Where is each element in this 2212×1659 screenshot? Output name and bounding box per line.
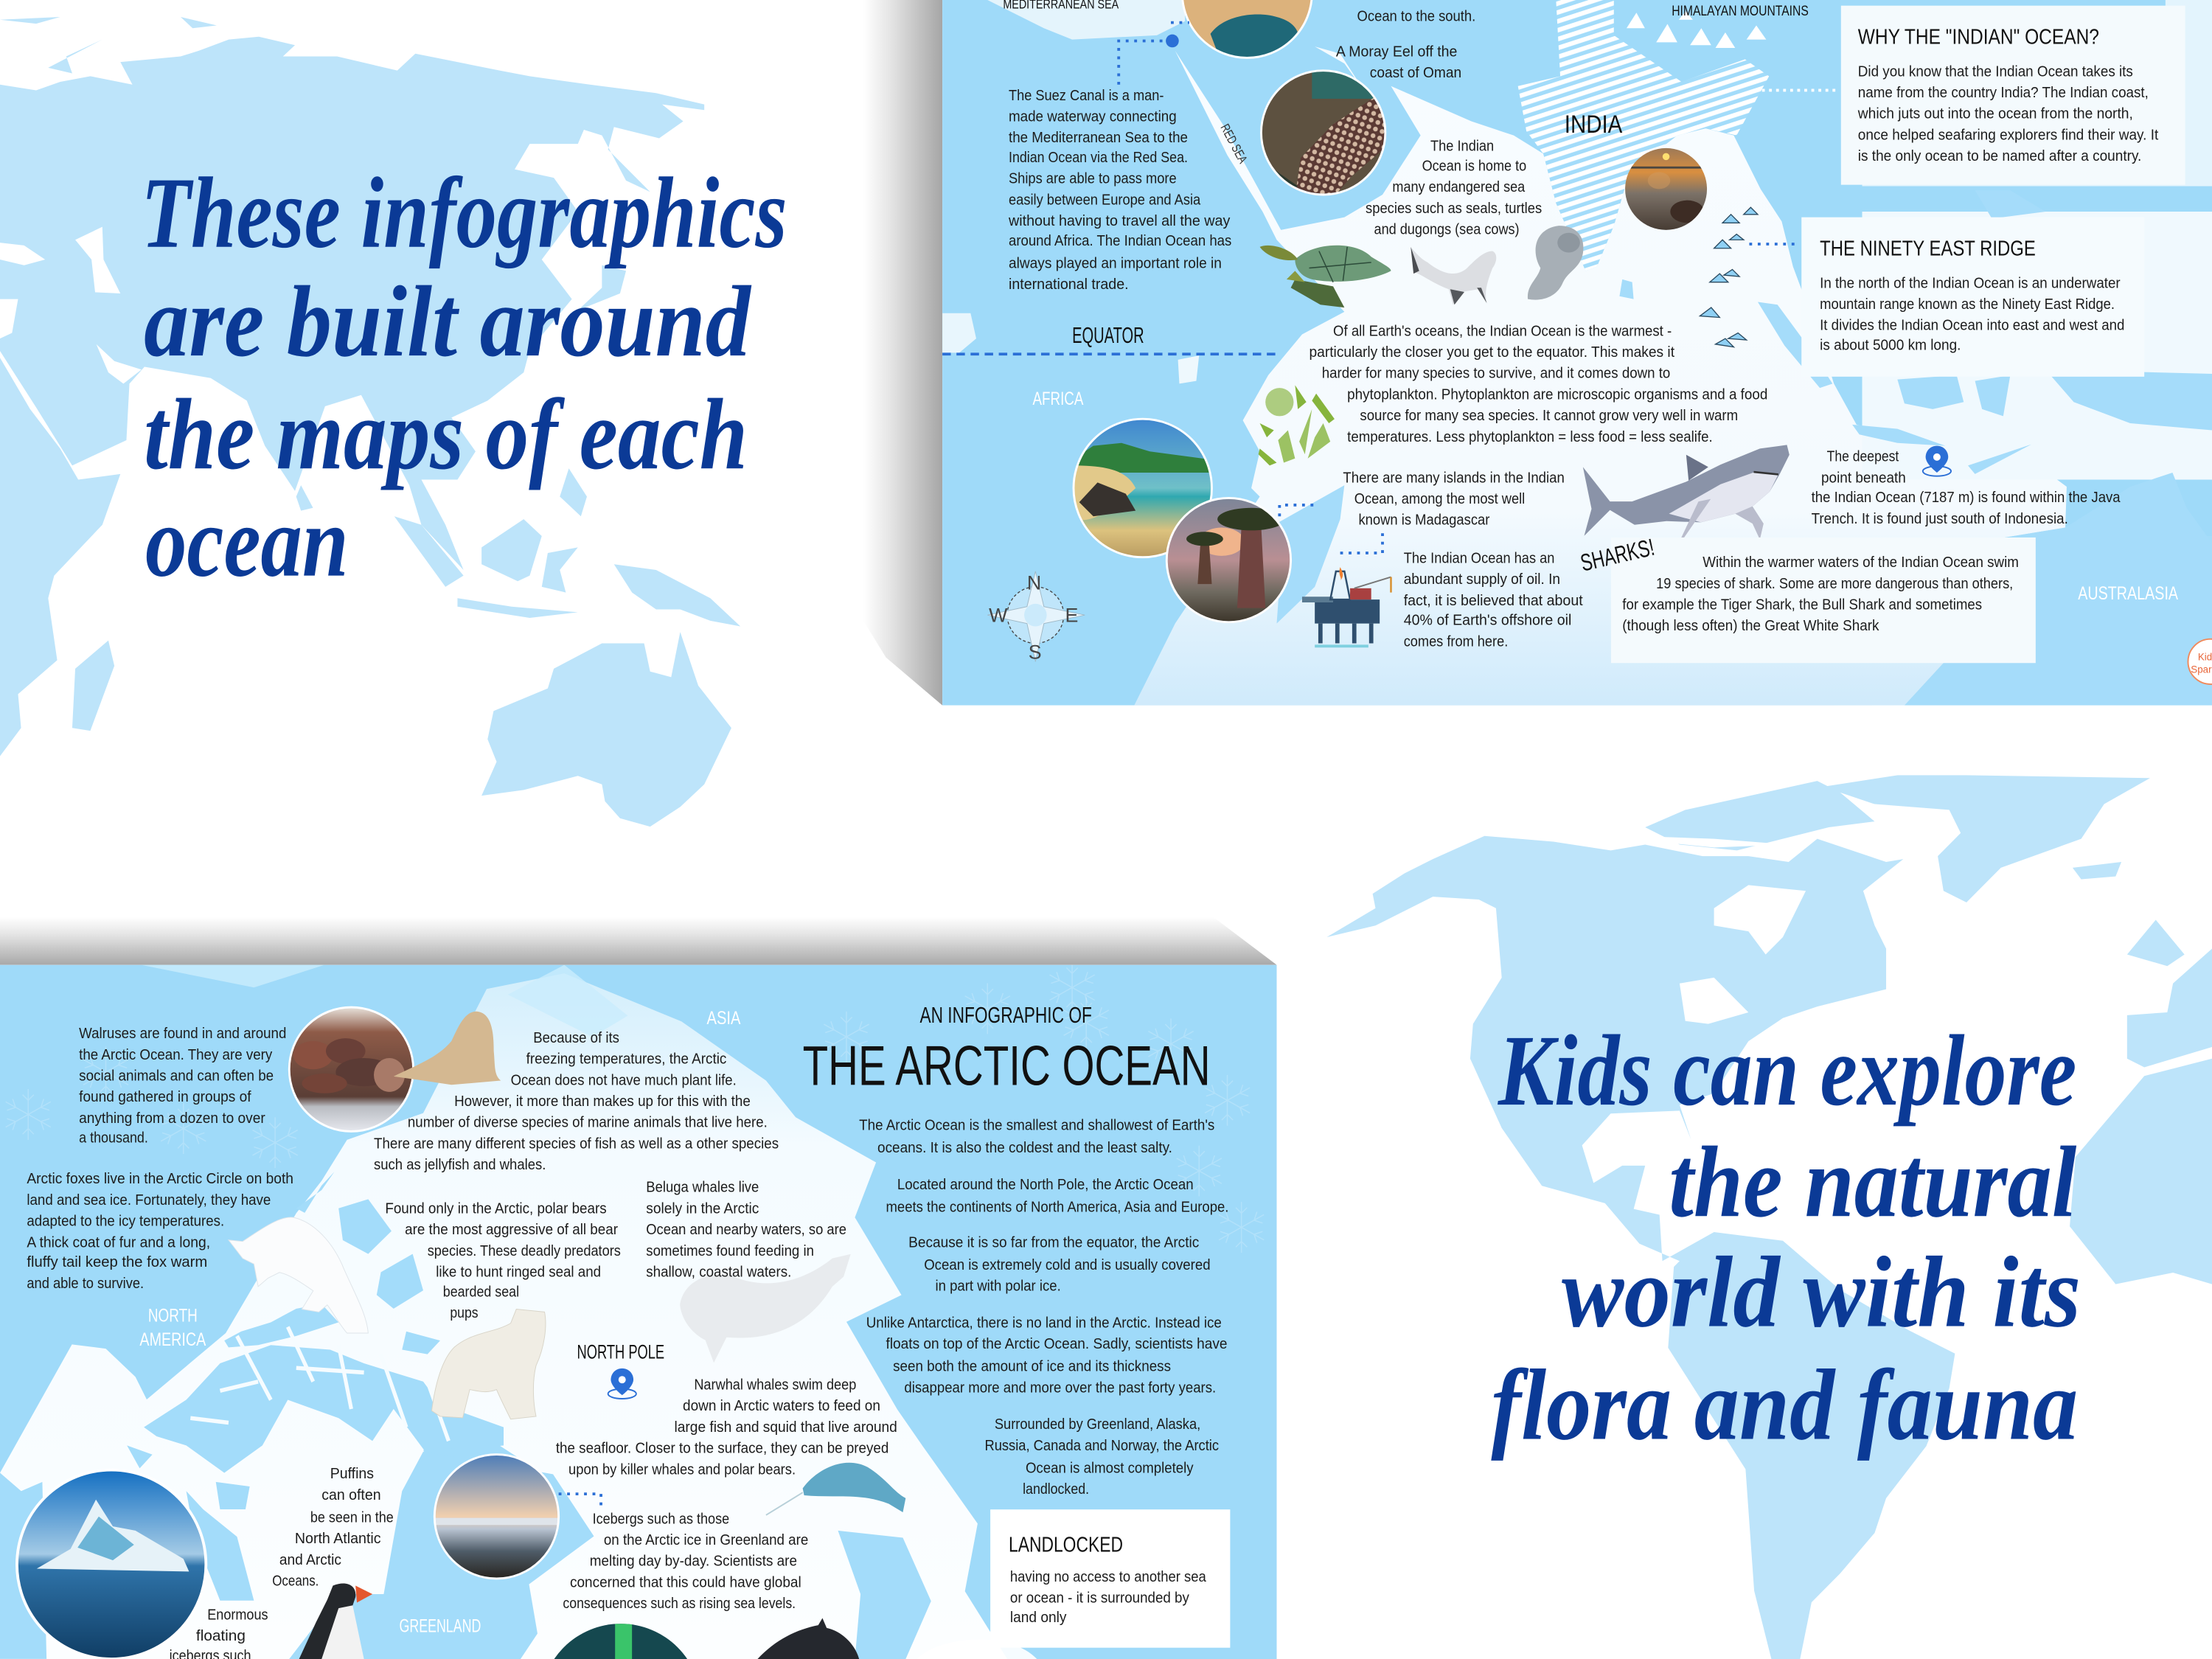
photo: walrus colony [289,1007,414,1131]
text: deepest point: point beneath [1821,470,1906,486]
text: oil: comes from here. [1404,633,1508,650]
pale top land [141,965,627,1037]
info box: why the Indian Ocean: which juts out into the ocean from the north, [1857,106,2133,122]
text: warmest ocean and phytoplankton: harder for many species to survive, and it comes down to [1322,366,1670,382]
text: beluga whales [646,1180,846,1281]
text: islands: known is Madagascar [1358,512,1490,529]
info box: sharks: Within the warmer waters of the Indian Ocean swim [1703,554,2019,571]
text: narwhal whales: down in Arctic waters to feed on [683,1398,880,1414]
text: Arctic Ocean facts: Russia, Canada and Norway, the Arctic [984,1438,1219,1454]
label: Greenland: GREENLAND [399,1616,481,1637]
text: arctic foxes: adapted to the icy temperatures. [27,1214,224,1230]
headline: explore the natural world: flora and fauna [1491,1349,2078,1461]
text: floating icebergs [170,1607,268,1659]
info box: why the Indian Ocean [1841,6,2185,185]
ocean area [1133,51,2067,708]
text: polar bears [385,1200,621,1321]
info box: landlocked: land only [1010,1610,1067,1626]
label: North Pole: NORTH POLE [577,1340,664,1363]
map pin: Java Trench [1923,446,1951,476]
text: puffins: be seen in the [310,1509,394,1526]
illustration: seamounts [1700,207,1758,347]
text: walruses [79,1026,286,1147]
map pin: North Pole [608,1368,636,1399]
subtitle: AN INFOGRAPHIC OF [919,1003,1092,1028]
headline: explore the natural world: Kids can explore [1497,1014,2076,1127]
text: Arctic Ocean facts: Surrounded by Greenland, Alaska, [995,1416,1200,1433]
headline: maps of each ocean: These infographics [141,156,787,269]
text: Arctic Ocean facts: meets the continents of North America, Asia and Europe. [886,1199,1228,1215]
label: India: INDIA [1565,111,1622,139]
photo: tropical beach [1072,417,1213,559]
photo: Greenland fjord [434,1455,559,1579]
Suez Canal marker [1166,35,1179,47]
text: endangered species [1366,139,1542,238]
text: marine life: number of diverse species of marine animals that live here. [408,1115,768,1131]
text: warmest ocean and phytoplankton: particularly the closer you get to the equator. This makes it [1310,344,1674,361]
text: marine life: However, it more than makes up for this with the [454,1093,751,1110]
info box: Ninety East Ridge: It divides the Indian Ocean into east and west and [1820,318,2124,334]
illustration: walrus [394,1012,501,1085]
text: icebergs melting [563,1511,808,1612]
text: beluga whales: sometimes found feeding in [646,1243,814,1259]
text: polar bears: are the most aggressive of all bear [405,1222,618,1238]
info box: Ninety East Ridge: In the north of the Indian Ocean is an underwater [1820,275,2121,291]
illustration: sea turtle [1260,246,1391,307]
text: Suez Canal: Indian Ocean via the Red Sea. [1009,150,1188,166]
logo: Kids Spark [2188,639,2212,684]
text: Suez Canal: The Suez Canal is a man- [1009,88,1164,104]
text: Arctic Ocean facts: Ocean is extremely cold and is usually covered [924,1257,1211,1273]
text: warmest ocean and phytoplankton: Of all Earth's oceans, the Indian Ocean is the warmest - [1333,323,1672,339]
text: oil: The Indian Ocean has an [1404,550,1554,566]
text: Suez Canal: the Mediterranean Sea to the [1009,130,1188,146]
text: marine life: Ocean does not have much plant life. [511,1072,737,1088]
label: North America: NORTH [148,1306,198,1326]
text: puffins: can often [321,1487,381,1503]
text: puffins: North Atlantic [295,1531,381,1547]
text: Arctic Ocean facts: seen both the amount of ice and its thickness [893,1359,1171,1375]
equator dashed line [942,353,1276,355]
text: deepest point [1812,449,2121,527]
text: islands [1343,470,1565,529]
text: icebergs melting: on the Arctic ice in Greenland are [604,1532,808,1548]
text: deepest point: the Indian Ocean (7187 m) is found within the Java [1812,490,2121,506]
Canadian Arctic islands [0,1172,521,1659]
text: marine life: Because of its [533,1030,619,1046]
headline: maps of each ocean: are built around [144,265,752,378]
illustration: compass rose [987,571,1085,663]
text: polar bears: pups [450,1305,479,1321]
text: polar bears: Found only in the Arctic, polar bears [385,1200,607,1217]
headline: explore the natural world [1491,1014,2081,1461]
heading: sharks: SHARKS! [1578,534,1657,577]
islands and neighbouring land [1277,190,2212,706]
caption: moray eel: coast of Oman [1370,65,1461,81]
text: Arctic Ocean facts: Unlike Antarctica, there is no land in the Arctic. Instead ice [866,1315,1222,1331]
info box: sharks: 19 species of shark. Some are more dangerous than others, [1656,576,2013,592]
text: Arctic Ocean facts: disappear more and more over the past forty years. [904,1380,1216,1396]
text: floating icebergs: Enormous [207,1607,268,1623]
text: arctic foxes [27,1171,293,1292]
info box: Ninety East Ridge: mountain range known as the Ninety East Ridge. [1820,296,2115,313]
info box: why the Indian Ocean: name from the country India? The Indian coast, [1858,85,2149,101]
illustration: polar bear [431,1310,546,1419]
photo: Persian Gulf from space [1183,0,1311,57]
info box: Ninety East Ridge: is about 5000 km long. [1820,337,1961,353]
label: Asia: ASIA [707,1008,741,1029]
text: islands: Ocean, among the most well [1354,491,1525,507]
text: walruses: the Arctic Ocean. They are very [79,1047,273,1063]
snow crystals [6,962,1264,1253]
text: Suez Canal: Ships are able to pass more [1009,171,1177,187]
illustration: phytoplankton [1259,385,1335,465]
dotted connectors [1279,244,1795,553]
text: Arctic Ocean facts: in part with polar ice. [935,1279,1061,1295]
text: puffins [272,1466,394,1590]
panel: Indian Ocean poster [942,0,2212,708]
text: endangered species: many endangered sea [1392,179,1526,195]
text: south of Ocean: Ocean to the south. [1357,9,1475,25]
Svalbard and Russian land [838,1531,931,1659]
photo: baobab trees [1165,496,1293,624]
text: Suez Canal: always played an important role in [1009,256,1222,272]
text: puffins: Puffins [330,1466,374,1482]
text: puffins: Oceans. [272,1573,319,1590]
text: beluga whales: shallow, coastal waters. [646,1265,791,1281]
text: walruses: Walruses are found in and around [79,1026,286,1042]
info box: sharks [1611,538,2036,663]
text: walruses: social animals and can often be [79,1068,274,1085]
text: islands: There are many islands in the Indian [1343,470,1565,486]
illustration: seal [1411,247,1496,305]
illustration: dugong [1528,226,1583,300]
text: Arctic Ocean facts: landlocked. [1023,1481,1089,1498]
text: warmest ocean and phytoplankton: temperatures. Less phytoplankton = less food = less sealife. [1347,429,1713,445]
text: arctic foxes: Arctic foxes live in the Arctic Circle on both [27,1171,293,1187]
text: oil: fact, it is believed that about [1404,593,1583,609]
India, striped [1518,0,1769,271]
text: narwhal whales: upon by killer whales and polar bears. [568,1461,796,1478]
text: narwhal whales: the seafloor. Closer to the surface, they can be preyed [556,1441,888,1457]
text: Suez Canal: without having to travel all the way [1008,213,1231,229]
headline: maps of each ocean: ocean [145,485,349,598]
text: polar bears: like to hunt ringed seal and [436,1265,601,1281]
caption: moray eel: A Moray Eel off the [1336,44,1457,60]
info box: why the Indian Ocean: WHY THE "INDIAN" OCEAN? [1858,25,2099,49]
photo: aurora [540,1624,701,1659]
text: marine life: There are many different species of fish as well as a other species [374,1135,779,1152]
info box: why the Indian Ocean: once helped seafaring explorers find their way. It [1858,127,2159,143]
headline: maps of each ocean [141,156,787,598]
illustration: orca [757,1618,859,1659]
info box: sharks: for example the Tiger Shark, the Bull Shark and sometimes [1622,597,1982,613]
text: Suez Canal: easily between Europe and Asia [1009,192,1201,208]
photo: moray eel [1262,72,1385,194]
illustration: oil rig [1302,567,1391,646]
photo: sunset over rocks [1622,147,1710,232]
text: endangered species: Ocean is home to [1422,159,1526,175]
illustration: compass rose: W [989,605,1008,627]
shadow behind Indian Ocean poster [863,0,942,706]
illustration: beluga whale [680,1254,851,1363]
text: marine life: freezing temperatures, the Arctic [526,1051,726,1068]
text: arctic foxes: fluffy tail keep the fox warm [27,1254,207,1270]
info box: landlocked: LANDLOCKED [1009,1534,1123,1557]
text: endangered species: species such as seals, turtles [1366,201,1542,217]
text: Arctic Ocean facts: Located around the North Pole, the Arctic Ocean [897,1177,1194,1193]
text: deepest point: Trench. It is found just south of Indonesia. [1812,511,2068,527]
text: Arctic Ocean facts [859,1118,1228,1498]
illustration: narwhal [766,1463,905,1515]
headline: maps of each ocean: the maps of each [144,378,748,490]
text: icebergs melting: Icebergs such as those [593,1511,729,1527]
shadow above Arctic Ocean poster [0,917,1277,965]
Greenland [289,1452,594,1659]
illustration: puffin [299,1584,372,1659]
text: warmest ocean and phytoplankton: phytoplankton. Phytoplankton are microscopic organisms and a food [1347,386,1767,403]
text: Arctic Ocean facts: Ocean is almost completely [1026,1460,1194,1476]
text: deepest point: The deepest [1827,449,1899,465]
text: Suez Canal: international trade. [1009,276,1129,293]
label: Red Sea: RED SEA [1217,122,1251,166]
info box: why the Indian Ocean: is the only ocean to be named after a country. [1858,148,2141,164]
text: warmest ocean and phytoplankton: source for many sea species. It cannot grow very well in warm [1360,408,1738,424]
text: polar bears: species. These deadly predators [428,1243,621,1259]
info box: why the Indian Ocean: Did you know that the Indian Ocean takes its [1858,63,2133,80]
text: Suez Canal: around Africa. The Indian Ocean has [1009,233,1231,249]
text: narwhal whales: Narwhal whales swim deep [694,1377,856,1394]
label: Africa: AFRICA [1033,389,1084,409]
text: icebergs melting: melting day by-day. Scientists are [590,1554,797,1570]
text: Arctic Ocean facts: floats on top of the Arctic Ocean. Sadly, scientists have [886,1336,1228,1352]
dotted connector: iceberg photo [559,1494,601,1509]
world map: the Americas and Greenland [1326,775,2212,1659]
dotted connector: Suez Canal [1119,23,1189,85]
text: endangered species: and dugongs (sea cows) [1374,222,1520,238]
text: Arctic Ocean facts: The Arctic Ocean is the smallest and shallowest of Earth's [859,1118,1214,1134]
dotted connector: Why Indian box [1755,89,1838,91]
label: Equator: EQUATOR [1072,323,1144,348]
panel: Arctic Ocean poster [0,962,1277,1659]
label: North America: AMERICA [139,1329,206,1350]
headline: explore the natural world: world with its [1562,1235,2081,1348]
info box: landlocked [990,1509,1230,1648]
Himalayan mountains icon [1627,11,1766,48]
caption: moray eel [1336,44,1461,81]
label: Himalayan Mountains: HIMALAYAN MOUNTAINS [1672,4,1809,19]
text: walruses: found gathered in groups of [79,1089,251,1105]
text: marine life [374,1030,779,1173]
text: Suez Canal: made waterway connecting [1009,109,1177,125]
text: icebergs melting: consequences such as rising sea levels. [563,1596,796,1612]
text: oil: 40% of Earth's offshore oil [1404,613,1571,629]
text: Arctic Ocean facts: Because it is so far from the equator, the Arctic [908,1234,1199,1251]
text: arctic foxes: and able to survive. [27,1276,144,1292]
headline: explore the natural world: the natural [1669,1125,2077,1238]
label: Australasia: AUSTRALASIA [2078,583,2178,604]
text: floating icebergs: floating [196,1628,246,1644]
text: arctic foxes: A thick coat of fur and a long, [27,1234,210,1251]
ocean area [0,973,1007,1659]
text: endangered species: The Indian [1430,139,1494,155]
text: beluga whales: Beluga whales live [646,1180,759,1196]
text: walruses: anything from a dozen to over [79,1110,265,1127]
text: polar bears: bearded seal [443,1284,519,1300]
illustration: compass rose: N [1027,572,1041,594]
photo: iceberg [14,1467,212,1659]
text: walruses: a thousand. [79,1130,148,1147]
info box: Ninety East Ridge: THE NINETY EAST RIDGE [1820,237,2036,260]
text: Suez Canal [1008,88,1231,293]
text: marine life: such as jellyfish and whales. [374,1157,546,1173]
info box: sharks: (though less often) the Great White Shark [1622,618,1879,634]
text: icebergs melting: concerned that this could have global [570,1574,801,1590]
text: warmest ocean and phytoplankton [1310,323,1767,445]
title: The Arctic Ocean: THE ARCTIC OCEAN [803,1034,1211,1097]
info box: landlocked: or ocean - it is surrounded by [1010,1590,1190,1606]
illustration: compass rose: S [1029,641,1042,663]
info box: landlocked: having no access to another sea [1010,1569,1207,1585]
world map: Asia, Africa and Australia [0,17,740,827]
text: arctic foxes: land and sea ice. Fortunately, they have [27,1192,271,1208]
text: narwhal whales: large fish and squid that live around [675,1419,897,1436]
text: beluga whales: Ocean and nearby waters, so are [646,1222,846,1238]
label: North America [139,1306,206,1350]
text: beluga whales: solely in the Arctic [646,1200,759,1217]
text: narwhal whales [556,1377,897,1478]
illustration: great white shark [1582,445,1790,538]
illustration: arctic fox [229,1217,368,1333]
text: Arctic Ocean facts: oceans. It is also the coldest and the least salty. [877,1140,1172,1156]
illustration: compass rose: E [1065,605,1078,627]
text: oil: abundant supply of oil. In [1404,571,1560,588]
text: puffins: and Arctic [279,1552,341,1568]
text: oil [1404,550,1583,650]
info box: Ninety East Ridge [1801,218,2144,377]
